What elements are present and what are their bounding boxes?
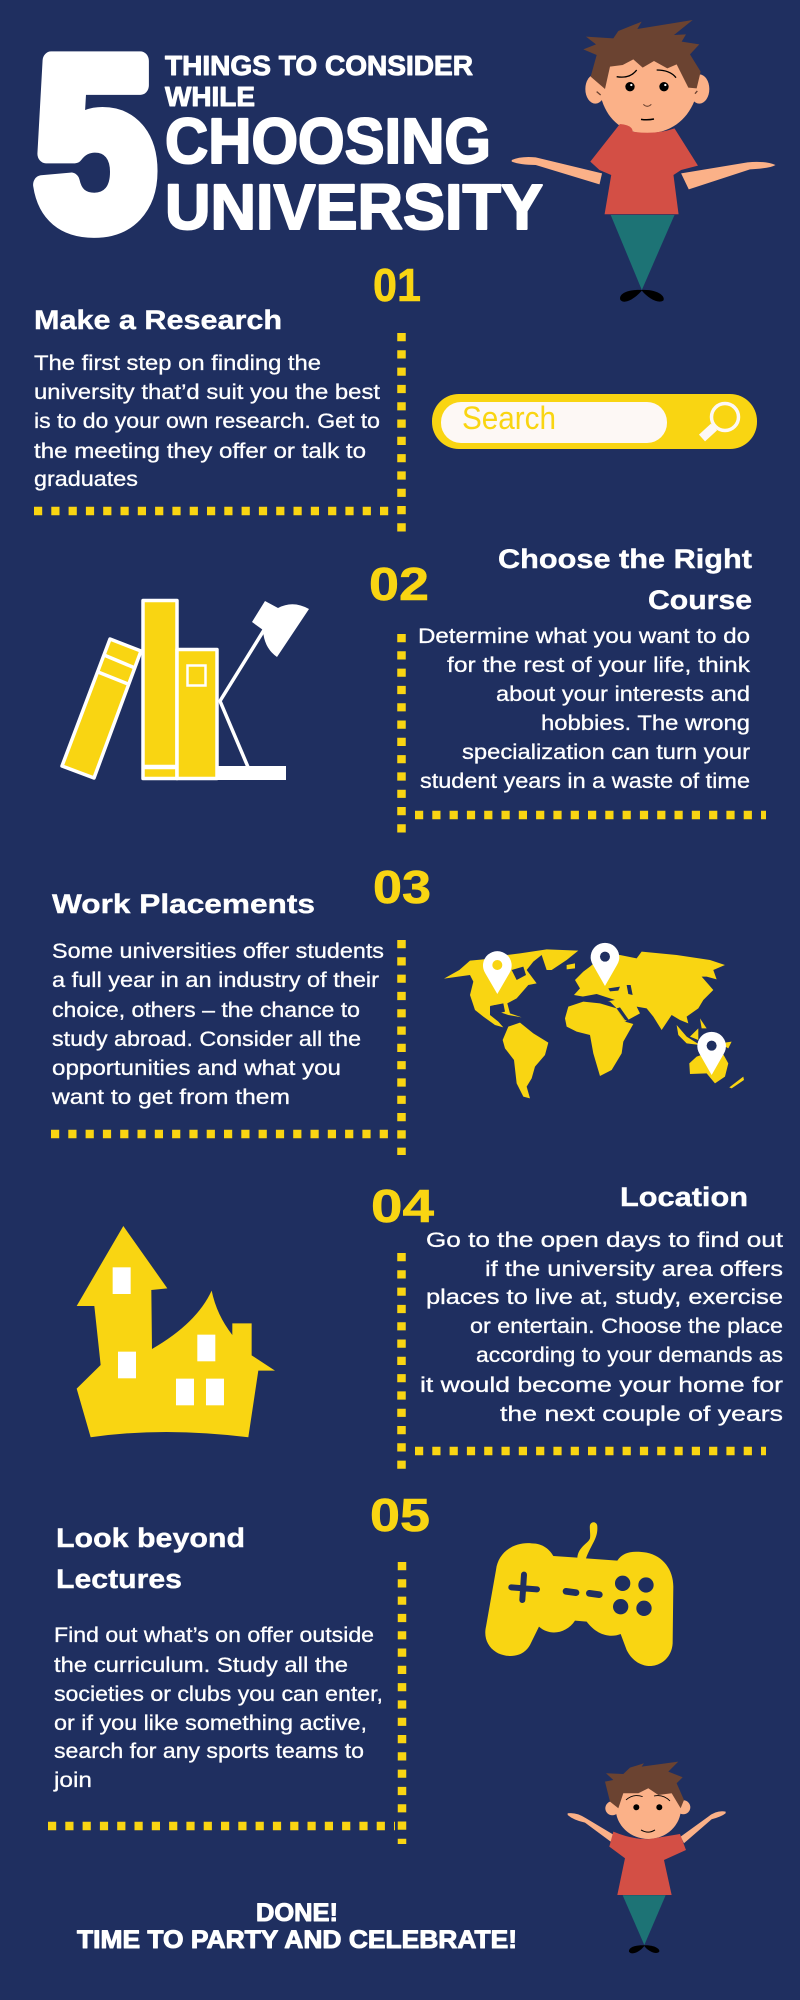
heading: Location [620, 1182, 748, 1212]
pin: europe [591, 943, 619, 986]
number 01: 01 [373, 259, 421, 311]
body text: about your interests and [496, 683, 750, 706]
heading: Work Placements [52, 889, 315, 919]
body text: societies or clubs you can enter, [54, 1683, 383, 1706]
heading: Course [648, 585, 752, 615]
body text: or if you like something active, [54, 1712, 367, 1735]
body text: opportunities and what you [52, 1057, 341, 1080]
pin: australia [697, 1032, 726, 1075]
body text: the curriculum. Study all the [54, 1654, 348, 1677]
body text: student years in a waste of time [420, 770, 750, 793]
panel: location [402, 1182, 783, 1474]
icon: search bar: Search [462, 400, 556, 436]
title line: things to consider: THINGS TO CONSIDER [165, 50, 473, 81]
body text: search for any sports teams to [54, 1740, 364, 1763]
character: happy student with raised arms [568, 1762, 726, 1953]
body text: the meeting they offer or talk to [34, 440, 366, 463]
body text [34, 352, 380, 491]
body text [53, 1624, 383, 1792]
heading: Look beyond [56, 1523, 245, 1553]
body text: hobbies. The wrong [541, 712, 750, 735]
number 05: 05 [370, 1489, 430, 1541]
body text: specialization can turn your [462, 741, 750, 764]
heading: Lectures [56, 1564, 182, 1594]
body text: for the rest of your life, think [447, 654, 751, 677]
number 03: 03 [373, 861, 431, 913]
body text: the next couple of years [500, 1403, 783, 1426]
body text: The first step on finding the [34, 352, 321, 375]
body text: if the university area offers [485, 1258, 783, 1281]
body text [418, 625, 751, 793]
title line: university: UNIVERSITY [165, 171, 543, 243]
closing message [77, 1899, 517, 1954]
body text: join [53, 1769, 92, 1792]
body text: study abroad. Consider all the [52, 1028, 361, 1051]
number 04: 04 [371, 1180, 435, 1232]
body text: university that’d suit you the best [34, 381, 380, 404]
icon: house [77, 1226, 275, 1437]
body text: a full year in an industry of their [52, 969, 379, 992]
title line: while: WHILE [165, 81, 255, 112]
icon: world map with pins [444, 943, 744, 1098]
body text: choice, others – the chance to [52, 999, 360, 1022]
icon: game controller [485, 1522, 673, 1666]
heading [498, 544, 752, 615]
title line: choosing: CHOOSING [165, 105, 491, 177]
icon: search bar [432, 394, 757, 449]
body text: Some universities offer students [52, 940, 384, 963]
body text: graduates [34, 468, 138, 491]
title [35, 9, 543, 277]
panel: choose the right course [402, 544, 766, 836]
big number 5: 5 [35, 9, 155, 277]
panel: look beyond lectures [48, 1523, 402, 1844]
body text: Go to the open days to find out [426, 1229, 783, 1252]
body text: want to get from them [51, 1086, 290, 1109]
body text: is to do your own research. Get to [34, 410, 380, 433]
panel: work placements [51, 889, 402, 1155]
heading: Make a Research [34, 305, 282, 335]
pin: north america [483, 951, 512, 994]
closing message: DONE! [256, 1899, 338, 1927]
body text: Determine what you want to do [418, 625, 750, 648]
closing message: TIME TO PARTY AND CELEBRATE! [77, 1926, 517, 1954]
body text: Find out what’s on offer outside [54, 1624, 374, 1647]
body text: it would become your home for [420, 1374, 783, 1397]
character: confused student shrugging [512, 20, 776, 302]
body text: according to your demands as [476, 1344, 783, 1367]
number 02: 02 [369, 558, 429, 610]
body text [51, 940, 384, 1109]
heading: Choose the Right [498, 544, 752, 574]
panel: make a research [34, 305, 402, 532]
heading [56, 1523, 245, 1594]
icon: books and desk lamp [62, 600, 309, 780]
body text: or entertain. Choose the place [470, 1315, 783, 1338]
body text [420, 1229, 783, 1426]
body text: places to live at, study, exercise [426, 1286, 783, 1309]
